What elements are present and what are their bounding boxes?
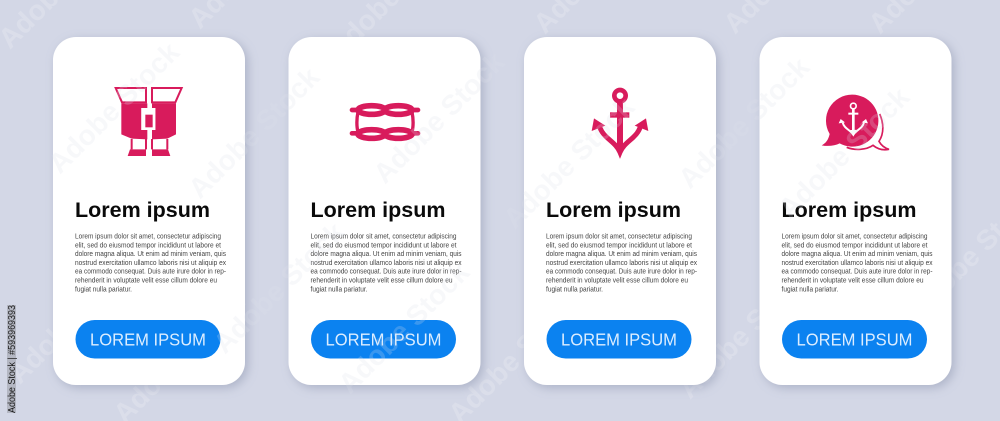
stock id label: Adobe Stock | #593969393 <box>7 305 18 413</box>
body text: fugiat nulla pariatur. <box>782 286 839 293</box>
body text: dolore magna aliqua. Ut enim ad minim veniam, quis <box>546 251 698 258</box>
panel: card 4 anchor speech bubble <box>760 37 952 385</box>
panel: card 2 knot <box>288 37 480 385</box>
panel: card 3 anchor <box>524 37 716 385</box>
card background <box>524 37 716 385</box>
body text <box>310 234 462 293</box>
watermark pattern over cards: Adobe Stock <box>672 51 816 194</box>
panel: card 1 binoculars <box>53 37 245 385</box>
heading: Lorem ipsum <box>310 197 446 222</box>
button <box>76 320 220 358</box>
heading: Lorem ipsum <box>546 197 681 222</box>
body text: Lorem ipsum dolor sit amet, consectetur adipiscing <box>782 234 928 240</box>
body text: dolore magna aliqua. Ut enim ad minim veniam, quis <box>782 251 933 258</box>
button: LOREM IPSUM <box>561 329 677 349</box>
watermark pattern on background: Adobe Stock <box>672 261 816 404</box>
button: LOREM IPSUM <box>90 329 206 349</box>
body text: dolore magna aliqua. Ut enim ad minim veniam, quis <box>75 251 227 258</box>
watermark pattern over cards: Adobe Stock <box>367 46 511 189</box>
heading: Lorem ipsum <box>782 197 916 222</box>
icon: speech bubble with anchor <box>822 95 889 150</box>
card background <box>760 37 952 385</box>
body text: fugiat nulla pariatur. <box>310 286 368 293</box>
icon: rope knot <box>352 106 418 138</box>
body text: elit, sed do eiusmod tempor incididunt ut labore et <box>782 242 928 249</box>
body text: nostrud exercitation ullamco laboris nisi ut aliquip ex <box>782 260 933 267</box>
body text: Lorem ipsum dolor sit amet, consectetur adipiscing <box>546 234 692 240</box>
body text: dolore magna aliqua. Ut enim ad minim veniam, quis <box>310 251 462 258</box>
heading: Lorem ipsum <box>75 197 210 222</box>
watermark pattern over cards: Adobe Stock <box>497 91 641 234</box>
body text: elit, sed do eiusmod tempor incididunt ut labore et <box>310 242 457 249</box>
watermark pattern over cards: Adobe Stock <box>182 61 326 204</box>
watermark pattern over cards <box>42 36 916 399</box>
body text: nostrud exercitation ullamco laboris nisi ut aliquip ex <box>546 260 698 267</box>
body text: ea commodo consequat. Duis aute irure dolor in rep- <box>75 269 226 276</box>
body text <box>782 234 933 293</box>
body text: rehenderit in voluptate velit esse cillum dolore eu <box>310 278 453 284</box>
icon: anchor <box>592 90 648 156</box>
body text: fugiat nulla pariatur. <box>546 286 603 293</box>
body text <box>75 234 227 293</box>
body text: Lorem ipsum dolor sit amet, consectetur adipiscing <box>75 234 221 240</box>
body text: fugiat nulla pariatur. <box>75 286 132 293</box>
body text: elit, sed do eiusmod tempor incididunt ut labore et <box>546 242 692 249</box>
button: LOREM IPSUM <box>326 329 442 349</box>
card background <box>288 37 480 385</box>
body text: nostrud exercitation ullamco laboris nisi ut aliquip ex <box>75 260 227 267</box>
body text: ea commodo consequat. Duis aute irure dolor in rep- <box>782 269 932 276</box>
body text: ea commodo consequat. Duis aute irure dolor in rep- <box>546 269 697 276</box>
icon: binoculars <box>116 88 182 156</box>
card background <box>53 37 245 385</box>
body text: nostrud exercitation ullamco laboris nisi ut aliquip ex <box>310 260 462 267</box>
button <box>546 320 692 358</box>
body text <box>546 234 698 293</box>
body text: rehenderit in voluptate velit esse cillum dolore eu <box>546 278 688 284</box>
watermark pattern over cards: Adobe Stock <box>42 36 186 179</box>
watermark pattern over cards: Adobe Stock <box>207 216 351 359</box>
button: LOREM IPSUM <box>796 329 912 349</box>
body text: ea commodo consequat. Duis aute irure dolor in rep- <box>310 269 462 276</box>
body text: elit, sed do eiusmod tempor incididunt ut labore et <box>75 242 221 249</box>
body text: rehenderit in voluptate velit esse cillum dolore eu <box>75 278 217 284</box>
watermark pattern on background: Adobe Stock <box>2 246 146 389</box>
body text: rehenderit in voluptate velit esse cillum dolore eu <box>782 278 924 284</box>
watermark pattern over cards: Adobe Stock <box>332 256 476 399</box>
watermark pattern over cards: Adobe Stock <box>772 81 916 224</box>
button <box>311 320 456 358</box>
body text: Lorem ipsum dolor sit amet, consectetur adipiscing <box>310 234 457 240</box>
button <box>782 320 927 358</box>
